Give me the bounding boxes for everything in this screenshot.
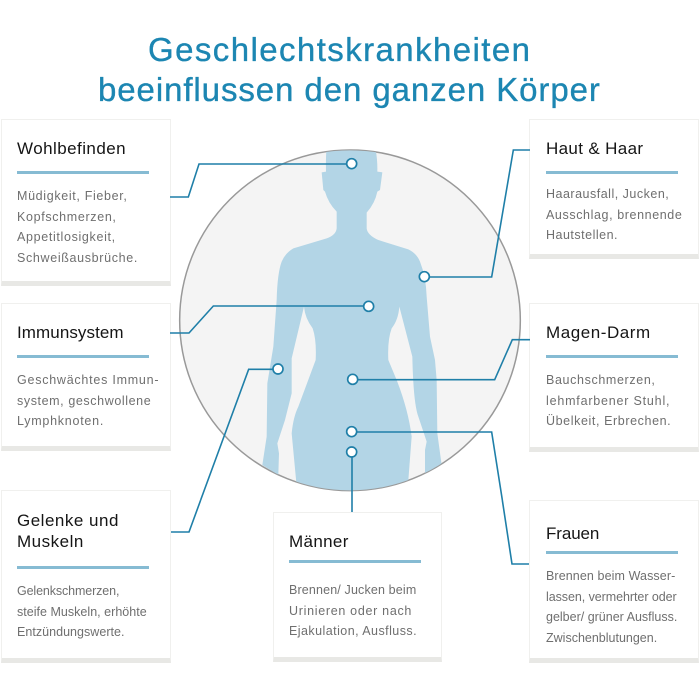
heading: Frauen: Frauen	[546, 524, 599, 543]
panel: Magen-Darm	[529, 303, 699, 452]
heading: Haut & Haar: Haut & Haar	[546, 139, 643, 158]
line: Männer	[350, 452, 354, 500]
line: Gelenke	[201, 369, 278, 500]
rule: Haut & Haar	[546, 171, 678, 174]
heading: Gelenke und Muskeln	[17, 511, 119, 551]
text: Wohlbefinden: Kopfschmerzen,	[17, 210, 117, 224]
heading: Immunsystem: Immunsystem	[17, 323, 124, 342]
text: Haut & Haar: Hautstellen.	[546, 228, 618, 242]
line: Haut	[424, 150, 530, 277]
marker dots	[273, 159, 429, 457]
text: Männer: Ejakulation, Ausfluss.	[289, 624, 417, 638]
text: Haut & Haar: Ausschlag, brennende	[546, 208, 682, 222]
text: Männer: Urinieren oder nach	[289, 604, 412, 618]
text: Männer: Brennen/ Jucken beim	[289, 583, 416, 597]
panel: Wohlbefinden	[1, 119, 171, 286]
title	[98, 31, 601, 108]
rule: Frauen	[546, 551, 678, 554]
panel: Immunsystem	[1, 303, 171, 451]
rule: Immunsystem	[17, 355, 149, 358]
text: Wohlbefinden: Schweißausbrüche.	[17, 251, 138, 265]
text: Magen-Darm	[546, 373, 671, 428]
text: Frauen: gelber/ grüner Ausfluss.	[546, 610, 677, 624]
line: Wohlbefinden	[170, 164, 352, 197]
text: Haut & Haar	[546, 187, 682, 242]
text: Magen-Darm: lehmfarbener Stuhl,	[546, 394, 670, 408]
text: Wohlbefinden: Appetitlosigkeit,	[17, 230, 116, 244]
title: Geschlechtskrankheiten	[148, 31, 531, 68]
line end: Frauen	[502, 500, 529, 564]
heading: Gelenke und Muskeln: Gelenke und	[17, 511, 119, 530]
text: Wohlbefinden	[17, 189, 138, 265]
outer connector ends	[171, 500, 529, 564]
text: Immunsystem	[17, 373, 159, 428]
text: Immunsystem: system, geschwollene	[17, 394, 151, 408]
text: Wohlbefinden: Müdigkeit, Fieber,	[17, 189, 128, 203]
panel: Gelenke und Muskeln	[1, 490, 171, 663]
panel: Haut & Haar	[529, 119, 699, 259]
text: Frauen: Brennen beim Wasser-	[546, 569, 675, 583]
panel: Männer	[273, 512, 442, 662]
heading: Wohlbefinden: Wohlbefinden	[17, 139, 126, 158]
rule: Gelenke und Muskeln	[17, 566, 149, 569]
line: Frauen	[352, 432, 502, 500]
line end: Gelenke	[171, 500, 201, 532]
line end: Männer	[351, 500, 353, 512]
text: Magen-Darm: Übelkeit, Erbrechen.	[546, 414, 671, 428]
text: Männer	[289, 583, 417, 638]
text: Haut & Haar: Haarausfall, Jucken,	[546, 187, 669, 201]
title: beeinflussen den ganzen Körper	[98, 71, 601, 108]
text: Frauen: lassen, vermehrter oder	[546, 590, 677, 604]
text: Magen-Darm: Bauchschmerzen,	[546, 373, 656, 387]
text: Frauen: Zwischenblutungen.	[546, 631, 657, 645]
heading: Gelenke und Muskeln: Muskeln	[17, 532, 84, 551]
text: Immunsystem: Lymphknoten.	[17, 414, 104, 428]
heading: Männer: Männer	[289, 532, 349, 551]
rule: Wohlbefinden	[17, 171, 149, 174]
rule: Magen-Darm	[546, 355, 678, 358]
body diagram	[170, 147, 530, 500]
text: Immunsystem: Geschwächtes Immun-	[17, 373, 159, 387]
text: Frauen	[546, 569, 677, 645]
panel: Frauen	[529, 500, 699, 663]
text: Gelenke und Muskeln: Entzündungswerte.	[17, 625, 125, 639]
text: Gelenke und Muskeln: Gelenkschmerzen,	[17, 584, 119, 598]
body silhouette	[262, 147, 442, 493]
circle background	[180, 150, 520, 491]
line: Magen	[353, 340, 530, 380]
rule: Männer	[289, 560, 421, 563]
text: Gelenke und Muskeln	[17, 584, 147, 639]
text: Gelenke und Muskeln: steife Muskeln, erhöhte	[17, 605, 147, 619]
heading: Magen-Darm: Magen-Darm	[546, 323, 651, 342]
connector lines	[170, 150, 530, 500]
line: Immunsystem	[170, 306, 369, 333]
